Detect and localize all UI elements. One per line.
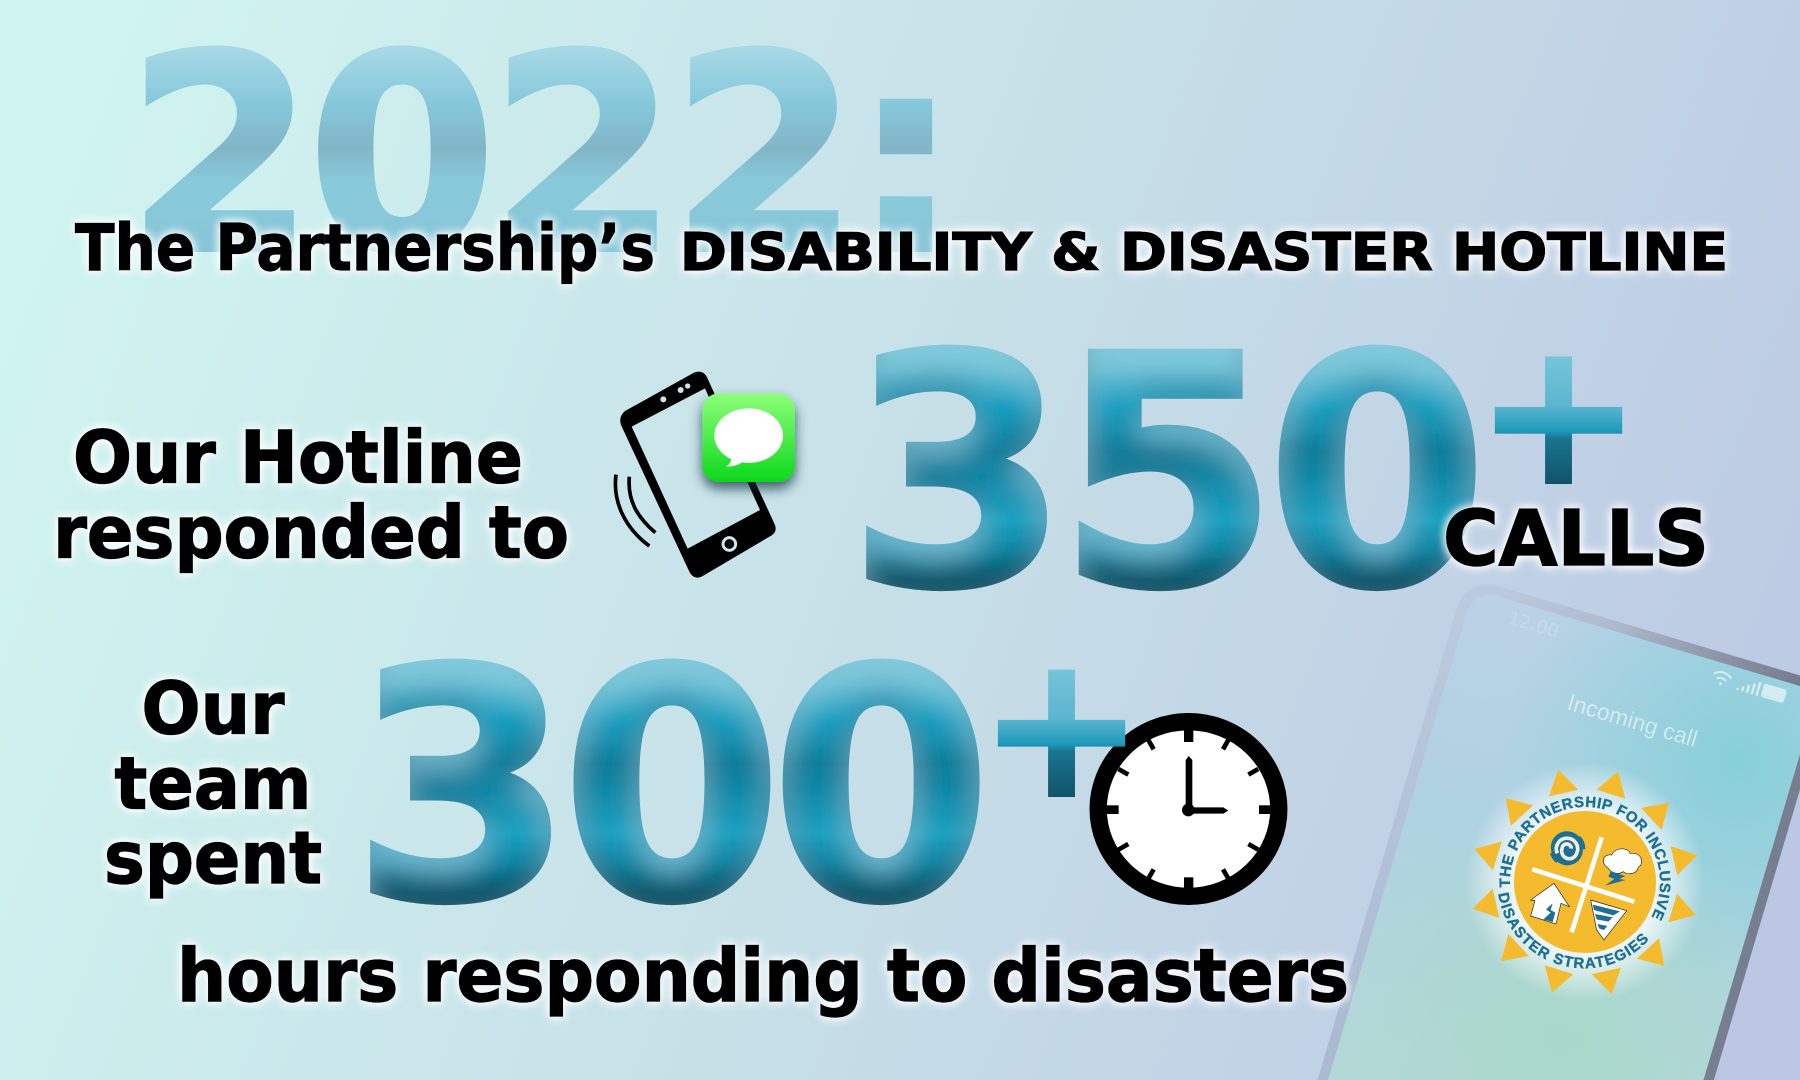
plus sign after 300: + [979,613,1144,842]
vibration waves [615,475,655,546]
title: The Partnership's Disability & Disaster Hotline: DISABILITY & DISASTER HOTLINE [680,223,1728,283]
text: Our team spent: Our [142,666,285,750]
phone frame, top [1500,587,1800,686]
logo ring text, top: THE PARTNERSHIP FOR INCLUSIVE [1499,796,1671,921]
title: The Partnership's Disability & Disaster Hotline [75,212,1728,286]
phone clock time: 12:00 [1506,608,1561,643]
phone outline [620,372,776,578]
logo halo [1465,762,1705,1002]
text: Our team spent: spent [104,816,322,900]
number: 300: 300 [352,603,980,973]
text: Our team spent: team [114,742,312,826]
sun rays [1470,767,1700,997]
clock tick marks [1104,727,1274,892]
big background year: 2022: 2022: [126,0,952,315]
label: CALLS: CALLS [1443,495,1709,584]
incoming call label: Incoming call [1565,689,1701,752]
message app icon [702,393,795,482]
home button [723,538,736,550]
phone status icons [1711,669,1787,704]
logo inner artwork [1531,830,1642,940]
logo inner gold disc [1514,811,1656,953]
plus sign after 350: + [1476,300,1641,529]
title: The Partnership's Disability & Disaster Hotline: The Partnership’s [75,212,655,286]
storm cloud icon [1603,849,1642,886]
text: Our Hotline responded to: Our Hotline [73,416,523,500]
phone frame, right [1704,754,1800,1080]
camera dots [660,383,690,402]
tornado icon [1591,900,1627,940]
clock hands [1186,756,1228,814]
white cross [1532,837,1634,932]
icon: vibrating smartphone with message bubble [615,372,795,578]
illustration: tilted smartphone with incoming call [1318,585,1800,1080]
text: Our Hotline responded to [53,416,569,574]
text: hours responding to disasters: hours responding to disasters [177,934,1349,1019]
icon: clock [1098,722,1279,896]
text: Our Hotline responded to: responded to [53,490,569,574]
logo ring text, bottom: DISASTER STRATEGIES [1498,892,1648,969]
phone frame, left [1318,585,1502,1080]
phone screen [1323,590,1800,1080]
number: 350: 350 [848,289,1476,659]
hurricane icon [1549,830,1585,867]
phone screen green tint [1323,590,1800,1080]
phone screen teal tint [1323,590,1800,1080]
damaged house icon [1531,883,1569,924]
logo: The Partnership for Inclusive Disaster Strategies [1471,768,1700,996]
text: Our team spent [104,666,322,900]
